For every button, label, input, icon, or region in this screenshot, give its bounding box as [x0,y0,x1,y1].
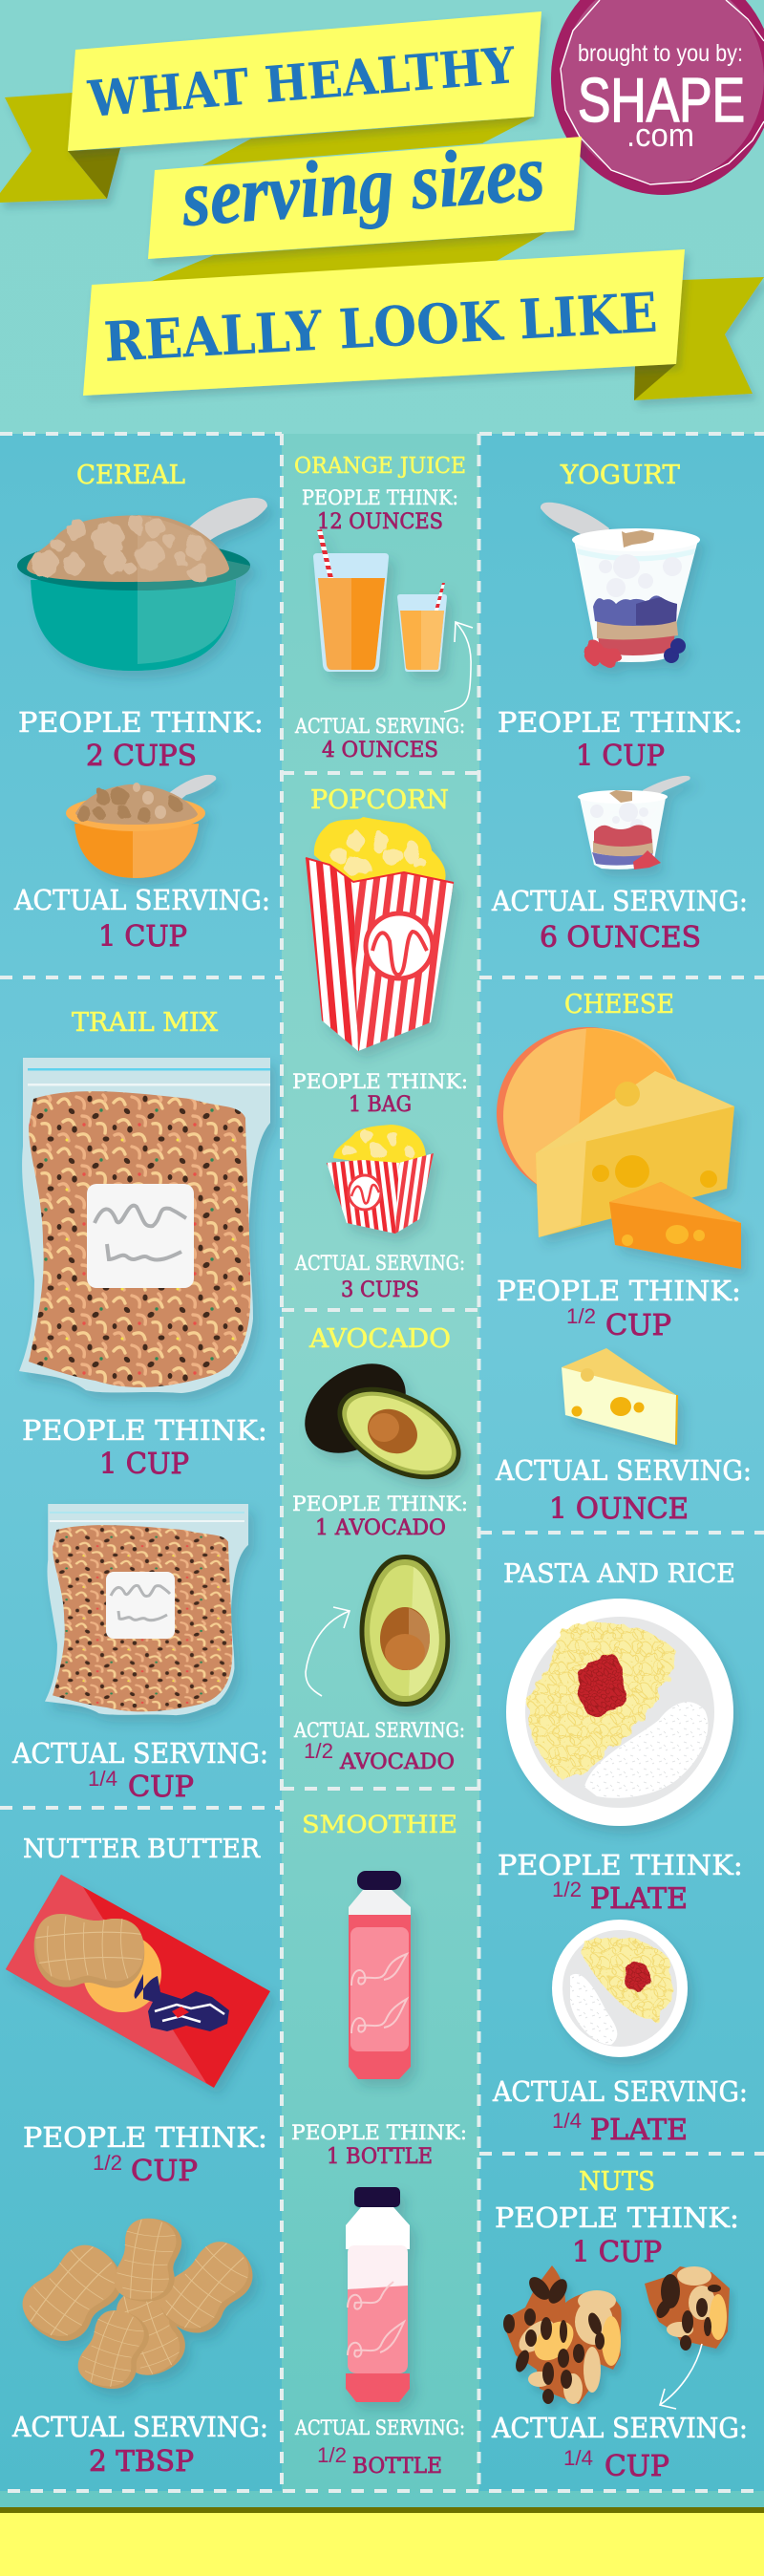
ribbon band one: WHAT HEALTHY: WHAT HEALTHY [85,36,518,129]
heading: PASTA AND RICE [503,1559,735,1589]
ribbon tail left [0,93,120,203]
label: people think: PEOPLE THINK: [22,1414,267,1447]
value: 1/2 plate: PLATE [590,1882,688,1916]
label: actual serving: ACTUAL SERVING: [495,1454,752,1487]
value: 1/2 plate: 1/2 [552,1878,582,1901]
value: 1/2 plate [552,1878,688,1916]
panel: yogurt [491,461,748,955]
value: 1 cup: 1 CUP [98,920,187,954]
panel: popcorn [292,785,468,1302]
ribbon band three: REALLY LOOK LIKE: REALLY LOOK LIKE [102,281,659,375]
icon: large popcorn box [306,817,454,1051]
icon: small cheese wedge [562,1348,678,1445]
icon: small glass of juice [397,583,447,672]
value: 1/4 cup [88,1767,194,1804]
label: people think: PEOPLE THINK: [292,1492,468,1515]
icon: cheese wheel and wedges [497,1027,741,1269]
label: actual serving: ACTUAL SERVING: [13,884,270,916]
heading: NUTTER BUTTER [23,1835,261,1864]
icon: small plate of pasta and rice [552,1920,688,2057]
heading: AVOCADO [308,1324,451,1354]
value: 1/2 cup: 1/2 [566,1304,596,1328]
heading: ORANGE JUICE [294,454,466,479]
value: 1/2 bottle: BOTTLE [352,2455,442,2479]
value: 1/4 plate: PLATE [590,2114,688,2147]
label: people think: PEOPLE THINK: [498,1849,743,1881]
arrow: to half avocado [306,1607,350,1696]
arrow: juice to small glass [444,622,473,712]
value: 1/2 cup [93,2151,198,2188]
panel: avocado [288,1324,477,1774]
ribbon band one: WHAT HEALTHY [68,11,541,151]
icon: half avocado [360,1555,450,1707]
badge: brought to you by SHAPE.com: brought to you by: [578,40,743,67]
ribbon band three: REALLY LOOK LIKE [83,249,685,396]
value: 1/4 cup: CUP [128,1771,194,1804]
heading: CHEESE [564,990,674,1020]
value: 1 cup: 1 CUP [99,1448,189,1481]
icon: full smoothie bottle [349,1871,411,2079]
label: actual serving: ACTUAL SERVING: [294,715,465,738]
value: 1 bottle: 1 BOTTLE [327,2145,433,2169]
icon: nutter butter package [6,1875,270,2088]
logo on small box [349,1175,381,1210]
value: 1/4 cup: 1/4 [563,2446,593,2470]
label: people think: PEOPLE THINK: [498,706,743,739]
label: people think: PEOPLE THINK: [292,1070,468,1093]
value: 1 bag: 1 BAG [349,1093,412,1117]
value: 4 ounces: 4 OUNCES [322,739,438,762]
icon: small nut cluster [645,2266,730,2351]
value: 1/2 bottle [317,2443,442,2479]
heading: NUTS [579,2167,655,2197]
value: 1/4 plate [552,2109,688,2147]
footer bar [0,2507,764,2576]
icon: small cereal bowl [66,775,216,878]
label: people think: PEOPLE THINK: [497,1275,741,1307]
icon: small yogurt parfait [578,776,690,869]
value: 1/2 cup: CUP [131,2155,198,2188]
value: 6 ounces: 6 OUNCES [540,921,701,955]
icon: large glass of juice [313,529,389,672]
label: people think: PEOPLE THINK: [291,2121,467,2144]
value: 2 cups: 2 CUPS [86,740,197,773]
value: 1/4 plate: 1/4 [552,2109,582,2133]
value: 2 tbsp: 2 TBSP [89,2445,194,2479]
panel: cheese [495,990,752,1526]
value: 1/4 cup: 1/4 [88,1767,117,1791]
label: actual serving: ACTUAL SERVING: [294,2416,465,2439]
icon: half full smoothie bottle [346,2187,410,2402]
icon: small popcorn box [327,1125,434,1234]
value: 1 cup: 1 CUP [576,740,665,773]
label: actual serving: ACTUAL SERVING: [11,2411,268,2443]
badge: brought to you by SHAPE.com: .com [626,118,694,154]
panel: cereal [13,461,270,954]
icon: large yogurt parfait [541,503,700,667]
value: 1 avocado: 1 AVOCADO [315,1516,446,1540]
value: 1/2 avocado: 1/2 [304,1739,333,1763]
icon: large cereal bowl [17,498,267,671]
icon: peanut shaped cookies [12,2215,264,2396]
value: 1 ounce: 1 OUNCE [549,1492,689,1526]
label: people think: PEOPLE THINK: [18,706,264,739]
icon: large nut cluster [503,2265,622,2404]
header: ribbon title [0,0,764,400]
panel: nutter butter [6,1835,270,2479]
heading: SMOOTHIE [302,1811,457,1838]
value: 1/2 cup [566,1304,671,1342]
value: 1/2 avocado [304,1739,455,1774]
icon: large trail mix bag [19,1058,270,1393]
heading: POPCORN [310,785,449,815]
value: 1/2 cup: 1/2 [93,2151,122,2175]
value: 1/2 cup: CUP [605,1309,671,1342]
bag label [87,1184,194,1288]
arrow: to smaller nut cluster [660,2344,702,2409]
ribbon tail right [634,277,764,400]
icon: small trail mix bag [45,1504,248,1715]
value: 1/4 cup [563,2446,669,2483]
label: people think: PEOPLE THINK: [302,486,458,509]
panel: trail mix [11,1008,270,1804]
value: 1/2 avocado: AVOCADO [339,1750,455,1774]
value: 1/2 bottle: 1/2 [317,2443,347,2467]
heading: YOGURT [560,461,680,490]
label: actual serving: ACTUAL SERVING: [491,885,748,917]
label: actual serving: ACTUAL SERVING: [293,1719,465,1742]
value: 1/4 cup: CUP [605,2450,669,2483]
badge: brought to you by SHAPE.com [551,0,764,195]
ribbon band two: serving sizes: serving sizes [179,128,547,244]
icon: whole avocado with cut half [288,1345,477,1498]
label: actual serving: ACTUAL SERVING: [492,2075,748,2108]
panel: orange juice [294,454,473,762]
ribbon fold one [202,117,534,165]
label: people think: PEOPLE THINK: [23,2121,267,2154]
panel: pasta and rice [492,1559,748,2147]
panel: nuts [491,2167,748,2483]
label: actual serving: ACTUAL SERVING: [491,2412,748,2444]
ribbon fold two [150,232,546,282]
heading: TRAIL MIX [72,1008,219,1038]
icon: large plate of pasta and rice [506,1599,733,1826]
label: people think: PEOPLE THINK: [495,2201,739,2234]
panel: smoothie [291,1811,467,2479]
logo on box [366,913,433,978]
value: 1 cup: 1 CUP [572,2236,662,2269]
heading: CEREAL [76,461,185,490]
label: actual serving: ACTUAL SERVING: [294,1252,465,1275]
value: 3 cups: 3 CUPS [341,1278,419,1302]
value: 12 ounces: 12 OUNCES [317,510,443,534]
small bag label [106,1572,175,1639]
label: actual serving: ACTUAL SERVING: [11,1737,268,1770]
